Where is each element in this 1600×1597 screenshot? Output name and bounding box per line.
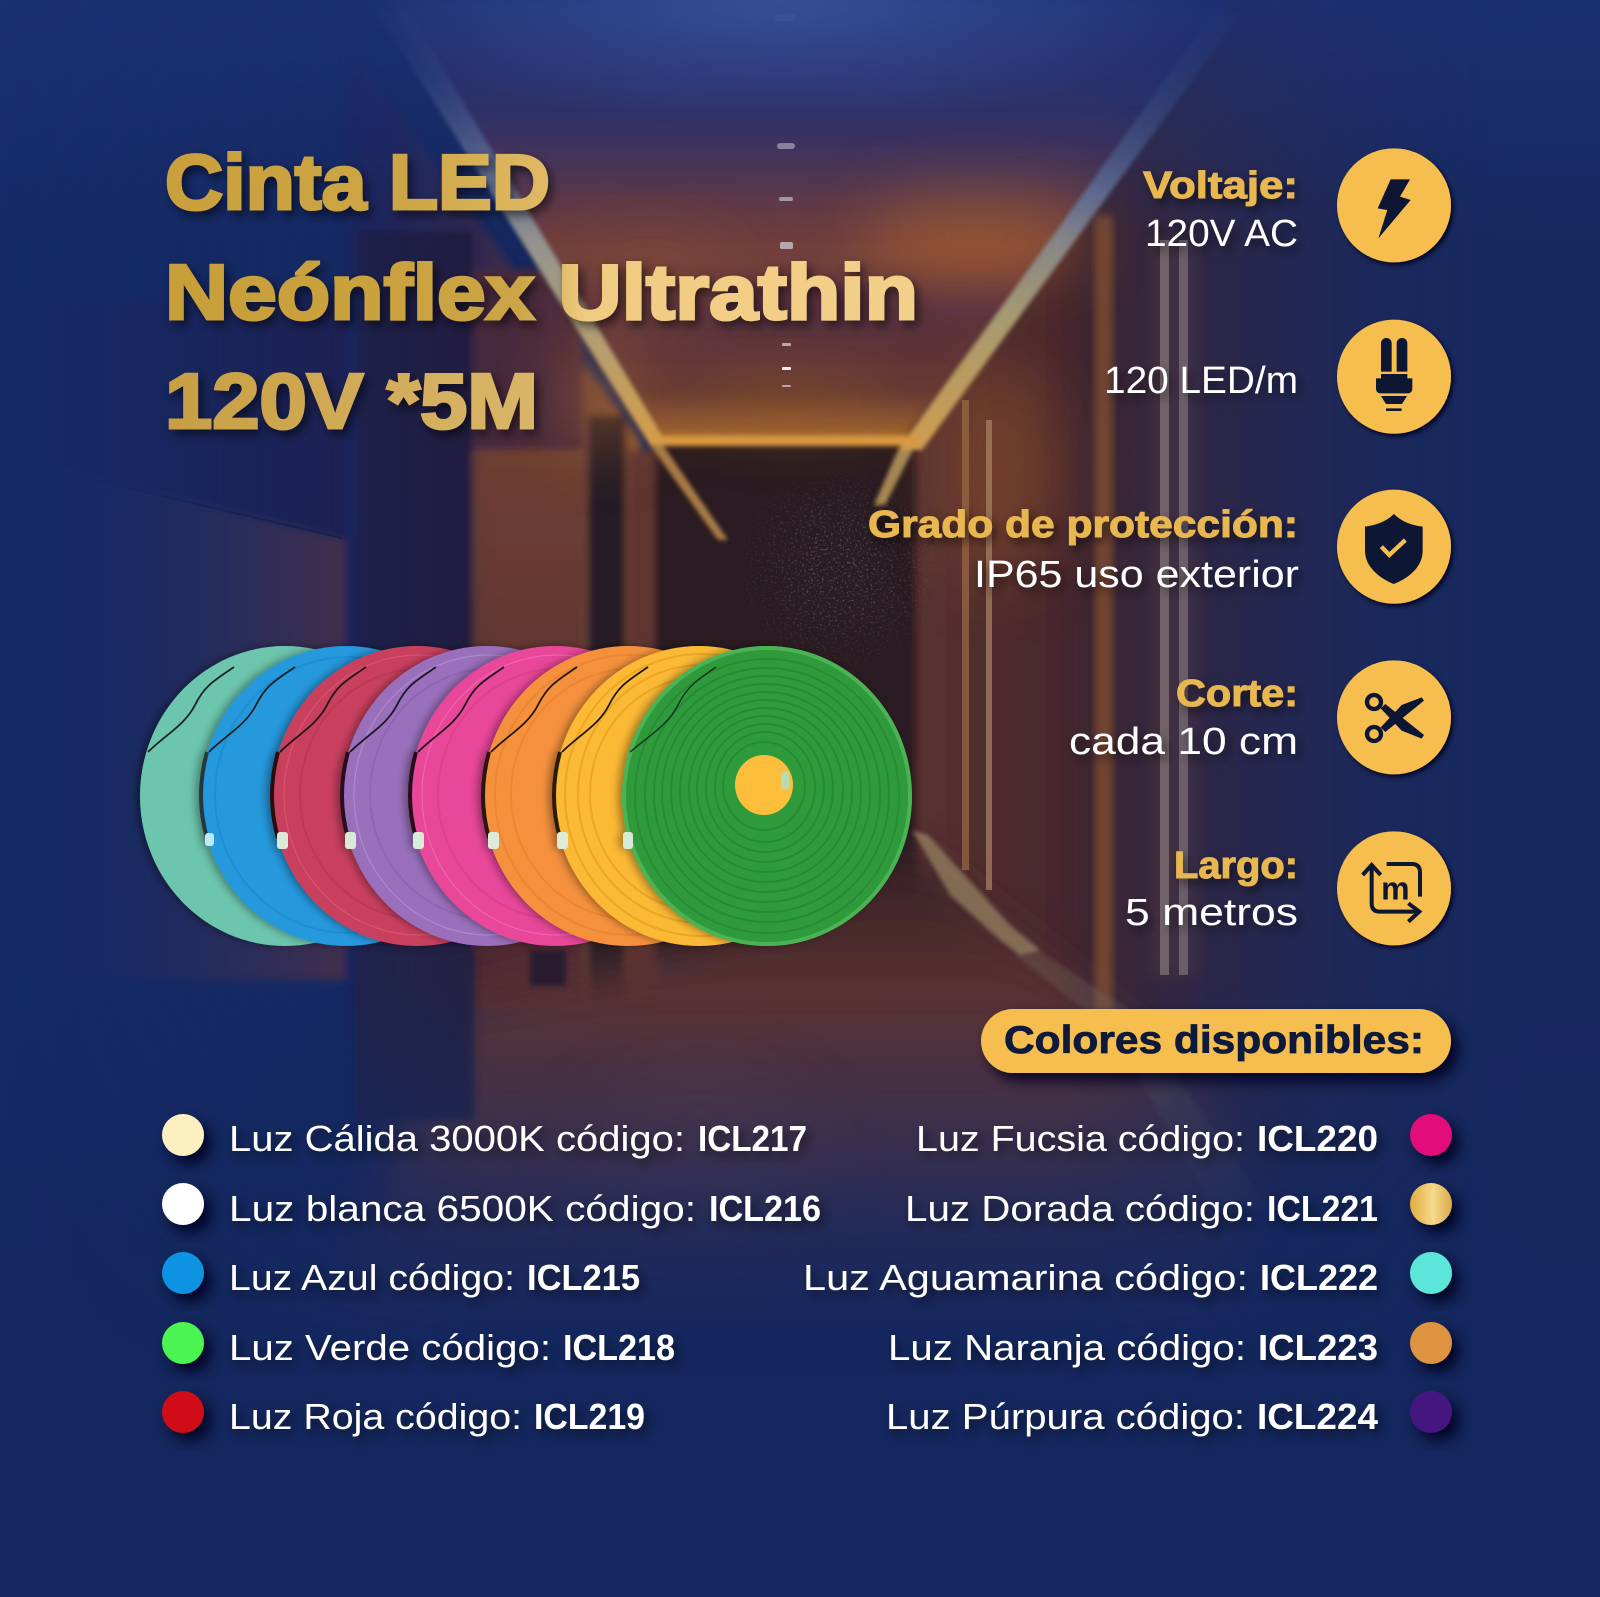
colour item ICL223: ICL223 <box>1258 1327 1378 1368</box>
colour item ICL220: ICL220 <box>1257 1118 1378 1159</box>
spec: largo: 5 metros <box>1125 892 1298 934</box>
spec: largo: Largo: <box>1174 845 1298 887</box>
coil: blue <box>201 646 491 946</box>
spec: LEDs per metre <box>1104 320 1451 434</box>
spec: voltaje <box>1143 148 1451 262</box>
spec: grado de proteccion <box>868 490 1451 604</box>
colour item ICL223: Luz Naranja código: <box>888 1327 1246 1368</box>
colour item ICL217: ICL217 <box>698 1118 807 1159</box>
ceiling spot lights <box>775 14 795 387</box>
colour item ICL218: Luz Verde código: <box>229 1327 551 1368</box>
colour item ICL221: ICL221 <box>1267 1188 1378 1229</box>
title: Cinta LED <box>165 138 550 226</box>
spec: grado de proteccion: IP65 uso exterior <box>974 554 1299 596</box>
spec: corte: cada 10 cm <box>1069 721 1298 763</box>
coil: green, front <box>622 646 912 946</box>
colour item ICL222: ICL222 <box>1260 1257 1378 1298</box>
colour item ICL216: ICL216 <box>709 1188 821 1229</box>
spec: corte <box>1069 660 1451 774</box>
colour item ICL218 <box>162 1322 675 1368</box>
title <box>165 138 918 445</box>
colour item ICL222: Luz Aguamarina código: <box>803 1257 1248 1298</box>
colour item ICL220: Luz Fucsia código: <box>916 1118 1245 1159</box>
coil: pink <box>410 646 700 946</box>
colour item ICL215: Luz Azul código: <box>229 1257 515 1298</box>
colour item ICL216: Luz blanca 6500K código: <box>229 1188 696 1229</box>
spec: voltaje: Voltaje: <box>1143 165 1298 207</box>
pill: colores disponibles: Colores disponibles: <box>1004 1019 1424 1062</box>
spec: grado de proteccion: Grado de protección: <box>868 504 1298 546</box>
colour item ICL215 <box>162 1252 640 1298</box>
product: LED coils in eight colours <box>140 646 912 946</box>
colour item ICL219: ICL219 <box>534 1396 645 1437</box>
end of hallway tree <box>746 474 934 666</box>
coil: red <box>272 646 562 946</box>
colour item ICL219: Luz Roja código: <box>229 1396 522 1437</box>
pill: colores disponibles <box>981 1009 1451 1073</box>
colour item ICL220 <box>916 1114 1452 1159</box>
colour item ICL216 <box>162 1183 821 1229</box>
icon: scissors <box>1337 660 1451 774</box>
legend: right column <box>803 1114 1452 1437</box>
legend: left column <box>162 1114 821 1437</box>
hallway floor <box>330 850 1240 1320</box>
colour item ICL222 <box>803 1252 1452 1298</box>
wall vertical light bars <box>962 215 1198 1025</box>
colour item ICL224: Luz Púrpura código: <box>886 1396 1245 1437</box>
colour item ICL218: ICL218 <box>563 1327 675 1368</box>
colour item ICL221: Luz Dorada código: <box>905 1188 1255 1229</box>
icon: shield <box>1337 490 1451 604</box>
colour item ICL219 <box>162 1391 645 1437</box>
floor light strip <box>912 830 1270 1210</box>
spec: LEDs per metre: 120 LED/m <box>1104 360 1298 402</box>
warm glow patches <box>560 190 1085 1240</box>
title: 120V *5M <box>165 357 538 445</box>
colour item ICL221 <box>905 1183 1452 1229</box>
icon: metre dimensions: m <box>1381 870 1410 906</box>
spec: voltaje: 120V AC <box>1145 213 1298 255</box>
colour item ICL224 <box>886 1391 1452 1437</box>
colour item ICL224: ICL224 <box>1257 1396 1378 1437</box>
coil: aqua <box>140 646 430 946</box>
coil: purple <box>342 646 632 946</box>
icon: metre dimensions <box>1337 831 1451 945</box>
coil: yellow <box>554 646 844 946</box>
spec: largo <box>1125 831 1451 945</box>
colour item ICL215: ICL215 <box>527 1257 640 1298</box>
ceiling light strips <box>376 10 1240 540</box>
colour item ICL217 <box>162 1114 807 1159</box>
coil: orange <box>483 646 773 946</box>
colour item ICL217: Luz Cálida 3000K código: <box>229 1118 685 1159</box>
title: Neónflex Ultrathin <box>165 248 918 336</box>
colour item ICL223 <box>888 1322 1452 1368</box>
spec: corte: Corte: <box>1176 673 1298 715</box>
icon: lightning bolt <box>1337 148 1451 262</box>
icon: bulb <box>1337 320 1451 434</box>
left wall line <box>0 458 342 538</box>
